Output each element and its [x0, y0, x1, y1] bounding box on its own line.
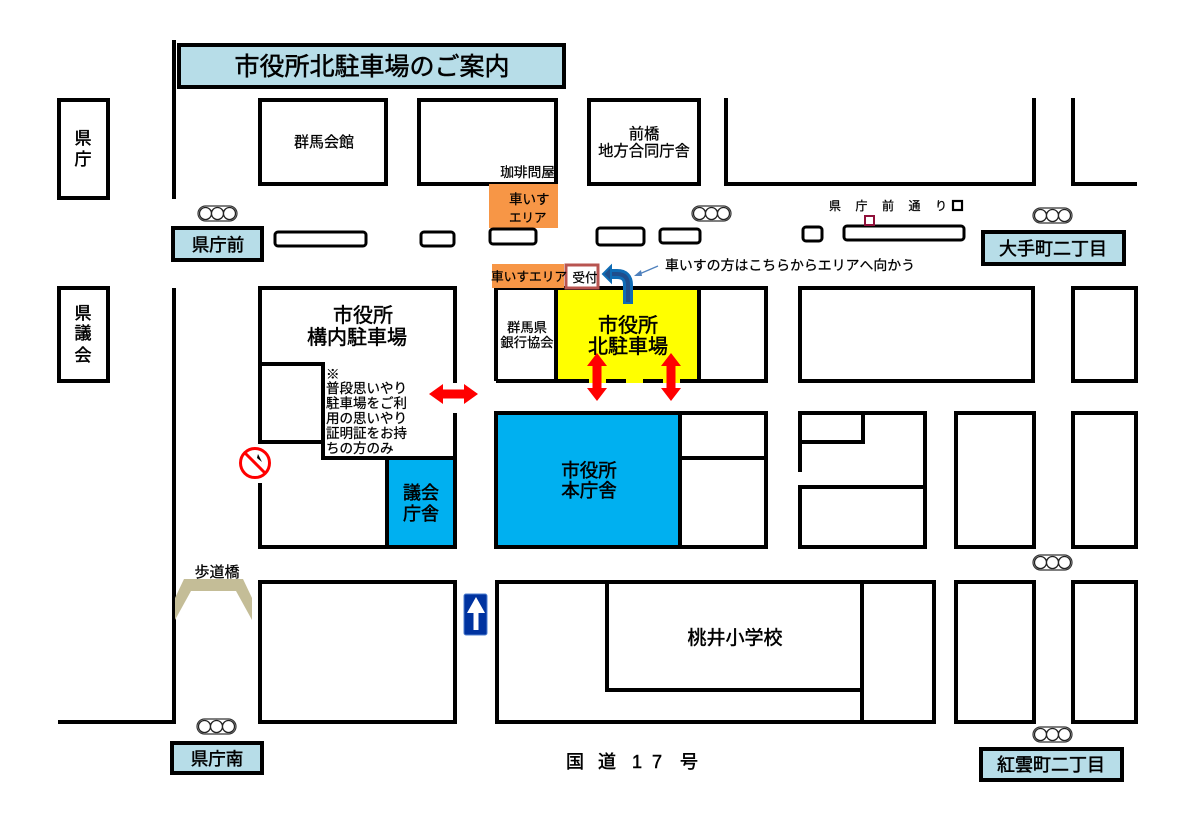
label: 県庁南: 県庁南: [191, 749, 243, 769]
building: 群馬会館: [260, 100, 386, 184]
road name: 国道17号: 国道17号: [566, 752, 698, 772]
block: 市役所構内駐車場: 駐車場をご利: [326, 396, 407, 411]
label: 県庁前: [173, 228, 262, 260]
block: 市役所構内駐車場: [260, 288, 455, 547]
block: 市役所構内駐車場: 用の思いやり: [326, 411, 407, 426]
title: [179, 45, 564, 87]
block: 市役所構内駐車場: 市役所: [333, 304, 393, 327]
block: 市役所本庁舎: [496, 413, 766, 547]
blocks: east upper: [800, 288, 1136, 381]
open block north 1: [726, 98, 1034, 184]
road edge: south west: [58, 288, 174, 722]
block: 市役所北駐車場: 銀行協会: [500, 335, 554, 350]
block: 市役所北駐車場: 群馬県: [507, 320, 547, 335]
label: 紅雲町二丁目: [981, 749, 1122, 780]
icon: no entry sign: [238, 446, 272, 480]
block: 市役所構内駐車場: 証明証をお持: [326, 426, 407, 441]
wheelchair area north: エリア: [509, 211, 547, 225]
block: 市役所構内駐車場: 議会: [403, 483, 439, 503]
wheelchair area and reception: [491, 264, 598, 288]
traffic light: 紅雲町二丁目: [1033, 727, 1072, 742]
blocks: east middle: [800, 413, 1136, 547]
arrow: north entrance 1: [587, 353, 607, 401]
median islands: [275, 226, 964, 246]
box: 県庁: 県: [74, 129, 92, 148]
box: 県議会: 県: [74, 304, 92, 323]
block: 市役所本庁舎: 市役所: [561, 460, 617, 481]
block: 市役所本庁舎: 本庁舎: [561, 480, 617, 501]
label: 県庁前: 県庁前: [192, 235, 244, 255]
note: wheelchair directions: 車いすの方はこちらからエリアへ向かう: [665, 257, 915, 273]
block: 市役所構内駐車場: ※: [326, 367, 340, 382]
box: 県議会: 議: [74, 324, 92, 343]
box: 県庁: [59, 100, 108, 198]
wheelchair area north: 車いす: [509, 192, 550, 207]
traffic light: east: [1033, 555, 1072, 570]
blue turn arrow: [603, 266, 628, 304]
block: 市役所構内駐車場: 庁舎: [403, 504, 439, 524]
block: 市役所構内駐車場: 普段思いやり: [326, 381, 407, 396]
building: 前橋地方合同庁舎: 地方合同庁舎: [598, 143, 690, 160]
building: 珈琲問屋: [419, 100, 556, 184]
wheelchair area and reception: 車いすエリア: [491, 270, 567, 284]
pedestrian bridge: [175, 564, 252, 620]
traffic light: 県庁南: [197, 719, 236, 734]
building: 前橋地方合同庁舎: [589, 100, 699, 184]
building: 前橋地方合同庁舎: 前橋: [629, 126, 659, 143]
label: 県庁南: [172, 743, 262, 773]
small square marker on island: [865, 216, 874, 225]
block: 桃井小学校: [497, 582, 934, 722]
arrow: north entrance 2: [661, 353, 681, 401]
arrow: west entrance: [429, 384, 478, 404]
wheelchair area north: [489, 184, 558, 228]
block: 市役所北駐車場: 市役所: [598, 314, 658, 337]
box: 県庁: 庁: [74, 150, 92, 169]
small square marker: [953, 201, 962, 210]
box: 県議会: [59, 288, 108, 381]
label: 大手町二丁目: [983, 232, 1124, 264]
road name: 県庁前通り: 県庁前通り: [829, 198, 962, 213]
building: 群馬会館: 群馬会館: [294, 134, 354, 151]
traffic light: 県庁前: [198, 206, 237, 221]
pedestrian bridge: 歩道橋: [194, 564, 240, 581]
block: 市役所北駐車場: [496, 288, 766, 383]
blocks: east lower: [956, 582, 1136, 722]
box: 県議会: 会: [74, 346, 92, 365]
wheelchair area and reception: 受付: [572, 271, 598, 285]
label: 紅雲町二丁目: 紅雲町二丁目: [997, 755, 1105, 775]
traffic light: 大手町二丁目: [1033, 208, 1072, 223]
block: 桃井小学校: 桃井小学校: [687, 627, 783, 649]
sign: one way: [464, 594, 487, 635]
label: 大手町二丁目: 大手町二丁目: [999, 239, 1107, 259]
title: 市役所北駐車場のご案内: [234, 53, 510, 81]
road edge: north west: [172, 40, 176, 199]
block: 市役所構内駐車場: ちの方のみ: [326, 441, 394, 456]
building: 珈琲問屋: 珈琲問屋: [500, 165, 555, 180]
block: south west: [260, 582, 455, 722]
pointer arrow: [634, 266, 658, 276]
block: 市役所構内駐車場: 構内駐車場: [307, 326, 407, 349]
open block north 2: [1073, 98, 1137, 184]
traffic light: north center: [692, 206, 731, 221]
block: 市役所北駐車場: 北駐車場: [588, 335, 668, 358]
